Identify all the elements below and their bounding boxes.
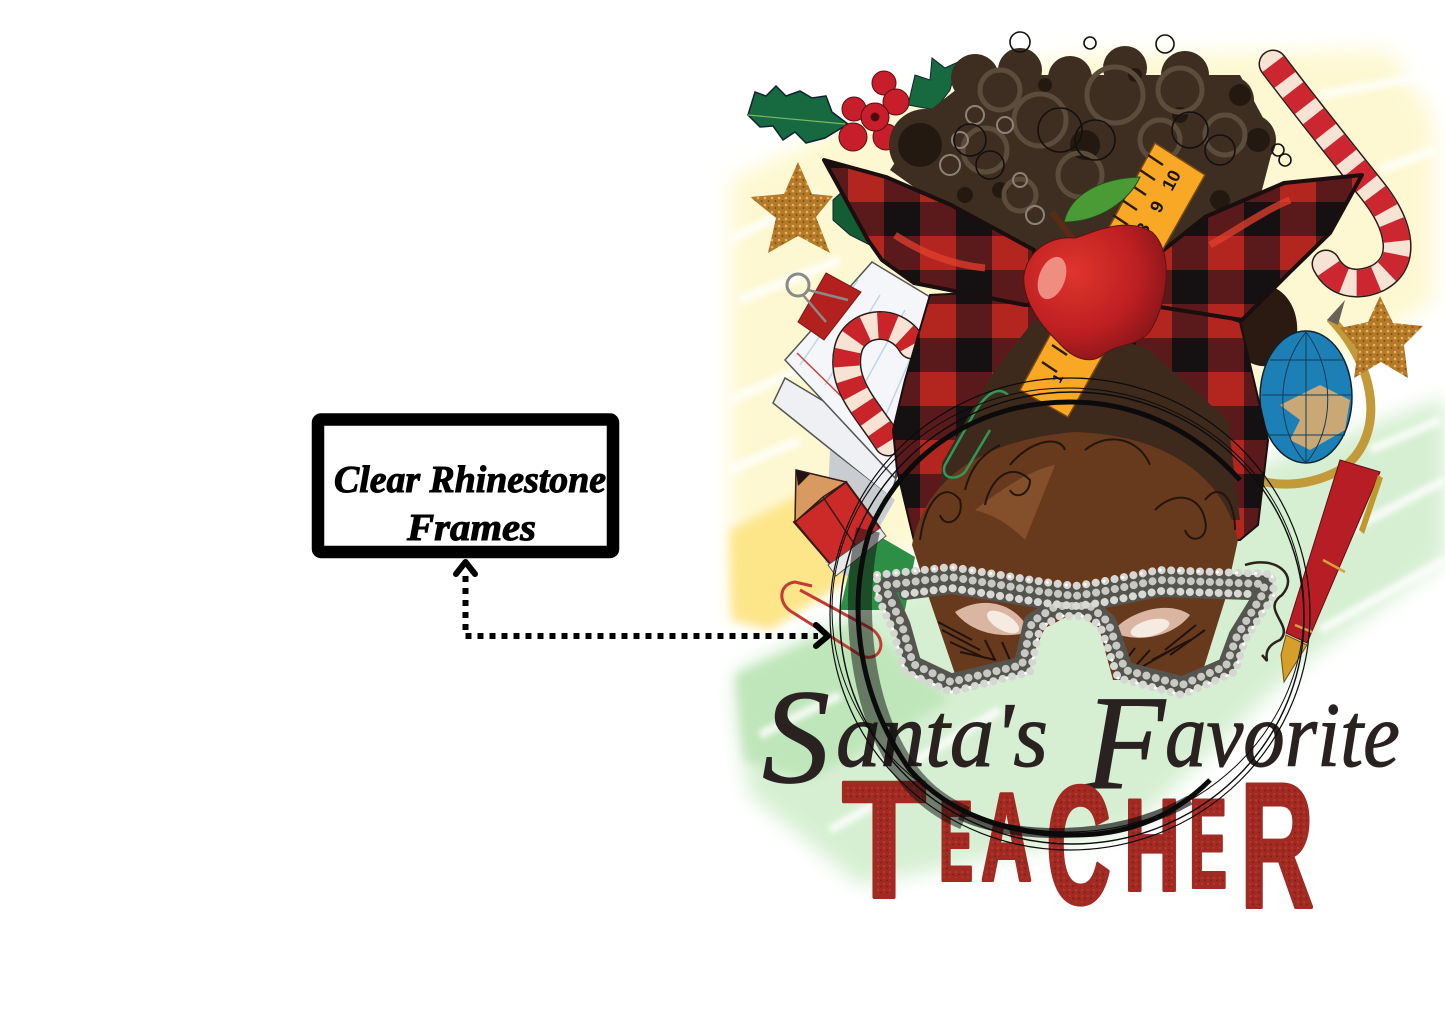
title: Santa's Favorite: S	[762, 663, 830, 812]
ruler: 9	[1146, 198, 1168, 216]
ruler: 8	[1132, 220, 1154, 238]
ruler: 10	[1158, 167, 1185, 194]
afro hair puff	[889, 32, 1291, 280]
title: TEACHER in red glitter: H	[1124, 772, 1180, 918]
apple	[1024, 212, 1166, 360]
glitter star right	[1340, 296, 1423, 378]
side hair bun	[1235, 285, 1297, 366]
dark side curls	[1245, 562, 1288, 660]
leaf on apple	[1064, 177, 1140, 222]
globe	[1258, 300, 1371, 484]
holly leaf top	[908, 58, 958, 110]
title: TEACHER in red glitter: E	[1189, 775, 1227, 914]
title: TEACHER in red glitter	[842, 746, 1314, 945]
watercolor wash background	[730, 50, 1445, 885]
pencil	[794, 470, 915, 610]
glitter star left	[750, 162, 833, 253]
headband bow right	[1160, 175, 1362, 320]
title: Santa's Favorite: avorite	[1165, 684, 1400, 786]
ruler	[1020, 143, 1205, 417]
paper notepad	[773, 262, 935, 578]
holly leaf left	[748, 86, 848, 143]
big candy cane	[1273, 64, 1397, 283]
holly berries	[839, 71, 909, 151]
callout box: Clear Rhinestone Frames: Clear Rhinestone	[334, 459, 606, 501]
headband bow left	[824, 160, 1040, 305]
eyelid shimmer and lashes	[938, 603, 1205, 672]
red paper clip	[782, 582, 881, 657]
dotted double-headed arrow linking callout to glasses	[456, 562, 828, 646]
callout box: Clear Rhinestone Frames: Frames	[406, 507, 536, 549]
inner hair above forehead	[940, 320, 1240, 520]
title: TEACHER in red glitter: C	[1046, 751, 1111, 939]
holly leaf behind bow	[833, 170, 890, 245]
title: TEACHER in red glitter: T	[842, 748, 926, 933]
binder clip	[787, 273, 861, 340]
fountain pen	[1281, 460, 1383, 682]
title: TEACHER in red glitter: A	[981, 769, 1032, 907]
poster artwork	[730, 32, 1445, 945]
title: Santa's Favorite	[762, 663, 1400, 818]
rhinestone glasses	[877, 567, 1274, 695]
title: Santa's Favorite: F	[1084, 669, 1166, 818]
baby hair curls	[920, 439, 1235, 540]
face skin	[912, 432, 1238, 680]
title: Santa's Favorite: anta's	[836, 684, 1048, 786]
small candy cane	[847, 326, 912, 442]
title: TEACHER in red glitter: R	[1240, 746, 1314, 945]
headband wrap around head	[893, 290, 1268, 545]
green paper clip	[944, 391, 1008, 478]
hand-drawn circle scribble frame	[830, 378, 1310, 850]
ruler: 1	[1049, 371, 1066, 385]
title: TEACHER in red glitter: E	[939, 779, 973, 904]
callout box: Clear Rhinestone Frames	[318, 420, 613, 552]
